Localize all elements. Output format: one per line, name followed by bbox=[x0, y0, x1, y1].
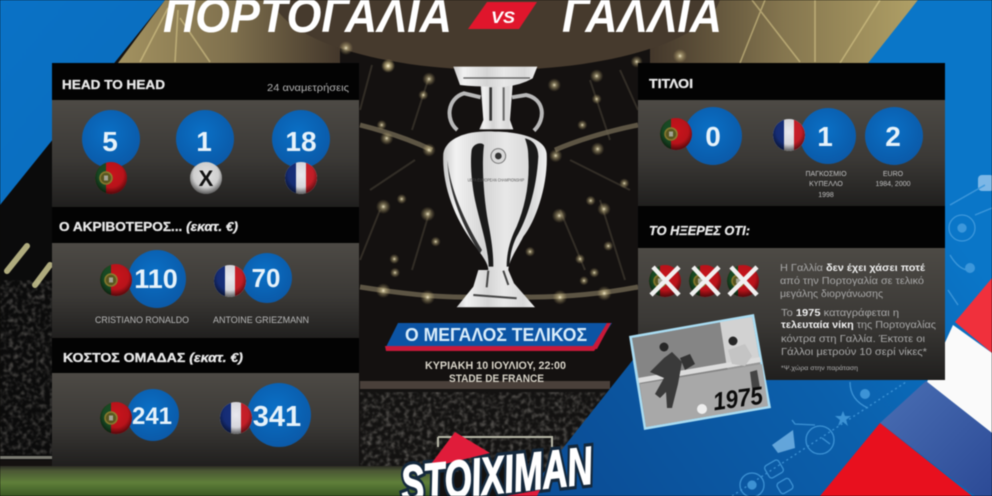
icon: Portugal flag bbox=[100, 264, 132, 296]
panel body: most expensive bbox=[52, 243, 359, 339]
text: meetings count: 24 αναμετρήσεις bbox=[267, 82, 349, 94]
stat: Portugal titles bbox=[684, 107, 742, 165]
text: fact two: τελευταία νίκη της Πορτογαλίας bbox=[781, 319, 936, 331]
text: fact one: μεγάλης διοργάνωσης bbox=[780, 288, 883, 300]
header bar: team value bbox=[52, 338, 359, 373]
stat: Griezmann value bbox=[242, 253, 292, 303]
panel: titles bbox=[638, 63, 945, 206]
blue shape: right side bbox=[525, 0, 992, 496]
icon: draw ball bbox=[190, 162, 222, 194]
text: fact two: κόντρα στη Γαλλία. Έκτοτε οι bbox=[781, 333, 925, 345]
stat: Griezmann value: 70 bbox=[252, 263, 280, 293]
icon: crossed Portugal flag 2 bbox=[689, 265, 721, 297]
panel: team value bbox=[52, 338, 359, 466]
caption: Griezmann: ANTOINE GRIEZMANN bbox=[213, 315, 309, 325]
panel: head to head bbox=[52, 63, 359, 207]
panel body: titles bbox=[638, 100, 945, 206]
caption: Euro: 1984, 2000 bbox=[875, 181, 911, 188]
stat: Ronaldo value bbox=[128, 250, 186, 308]
versus badge bbox=[468, 2, 537, 29]
logo: Stoiximan bbox=[398, 432, 596, 496]
icon: crossed Portugal flag 1 bbox=[649, 265, 681, 297]
icon: France flag bbox=[773, 119, 805, 151]
header bar: most expensive bbox=[52, 207, 359, 243]
versus badge: VS bbox=[491, 8, 516, 27]
text: fact one: Η Γαλλία δεν έχει χάσει ποτέ bbox=[780, 262, 926, 274]
icon: France flag bbox=[220, 402, 252, 434]
icon: draw ball: X bbox=[199, 166, 214, 191]
text: fact one: από την Πορτογαλία σε τελικό bbox=[780, 275, 924, 287]
panel: did you know bbox=[638, 206, 945, 380]
caption: Ronaldo: CRISTIANO RONALDO bbox=[95, 315, 189, 325]
stat: Portugal team value: 241 bbox=[132, 403, 172, 430]
stat: draws: 1 bbox=[196, 126, 212, 157]
stat: World Cup titles: 1 bbox=[817, 121, 833, 152]
text: match date: ΚΥΡΙΑΚΗ 10 ΙΟΥΛΙΟΥ, 22:00 bbox=[425, 360, 566, 372]
stat: Portugal team value bbox=[127, 389, 179, 441]
text: fact one bbox=[780, 262, 926, 300]
stat: Euro titles bbox=[865, 107, 923, 165]
stat: France team value: 341 bbox=[253, 401, 301, 433]
panel: most expensive player bbox=[52, 207, 359, 339]
pattern: football doodles bbox=[732, 175, 992, 496]
icon: France flag bbox=[214, 265, 246, 297]
caption: World Cup: 1998 bbox=[818, 192, 834, 199]
stat: Euro titles: 2 bbox=[885, 121, 901, 152]
base bbox=[457, 270, 535, 307]
icon: France flag bbox=[285, 162, 317, 194]
blue shape: top left bbox=[0, 0, 165, 205]
caption: Euro: EURO bbox=[883, 171, 904, 178]
stat: France team value bbox=[247, 383, 311, 447]
footnote: *Ψ.χώρα στην παράταση bbox=[781, 365, 858, 372]
banner: the big final bbox=[385, 323, 612, 351]
trophy bbox=[443, 67, 547, 307]
icon: Portugal flag bbox=[100, 402, 132, 434]
rim bbox=[453, 67, 537, 87]
stat: Portugal wins bbox=[82, 110, 140, 168]
photo: 1975 match bbox=[629, 314, 771, 430]
stat: Ronaldo value: 110 bbox=[134, 264, 178, 294]
heading: titles: ΤΙΤΛΟΙ bbox=[649, 76, 693, 91]
icon: Portugal flag bbox=[95, 162, 127, 194]
stat: Portugal titles: 0 bbox=[705, 121, 721, 152]
caption: World Cup: ΠΑΓΚΟΣΜΙΟ bbox=[805, 171, 847, 178]
text: fact two: Γάλλοι μετρούν 10 σερί νίκες* bbox=[781, 346, 927, 358]
stat: France wins: 18 bbox=[285, 126, 317, 157]
text: venue: STADE DE FRANCE bbox=[449, 373, 544, 385]
heading: head to head: HEAD TO HEAD bbox=[62, 77, 165, 92]
header bar: head to head bbox=[52, 63, 359, 100]
panel body: head to head bbox=[52, 100, 359, 207]
header bar: titles bbox=[638, 63, 945, 100]
trophy inscription: UEFA EUROPEAN CHAMPIONSHIP bbox=[468, 178, 524, 183]
body bbox=[443, 131, 547, 270]
stat: draws bbox=[176, 110, 234, 168]
heading: did you know: ΤΟ ΗΞΕΡΕΣ ΟΤΙ: bbox=[649, 223, 750, 238]
panel body: team value bbox=[52, 373, 359, 466]
stat: World Cup titles bbox=[800, 108, 856, 164]
stat: Portugal wins: 5 bbox=[102, 126, 118, 157]
header bar: did you know bbox=[638, 206, 945, 248]
neck bbox=[479, 85, 513, 129]
handwritten year: 1975 bbox=[711, 382, 766, 416]
icon: crossed Portugal flag 3 bbox=[727, 265, 759, 297]
handles bbox=[450, 93, 542, 131]
heading: team value: ΚΟΣΤΟΣ ΟΜΑΔΑΣ (εκατ. €) bbox=[63, 350, 243, 365]
icon: Portugal flag bbox=[660, 118, 692, 150]
banner: the big final: Ο ΜΕΓΑΛΟΣ ΤΕΛΙΚΟΣ bbox=[405, 325, 587, 345]
decorative flag triangles bbox=[820, 278, 992, 496]
stat: France wins bbox=[272, 110, 330, 168]
heading: most expensive: Ο ΑΚΡΙΒΟΤΕΡΟΣ... (εκατ. €) bbox=[59, 219, 238, 234]
text: fact two bbox=[781, 307, 936, 358]
caption: World Cup: ΚΥΠΕΛΛΟ bbox=[809, 181, 843, 188]
panel body: did you know bbox=[638, 248, 945, 380]
text: fact two: Το 1975 καταγράφεται η bbox=[781, 307, 899, 319]
